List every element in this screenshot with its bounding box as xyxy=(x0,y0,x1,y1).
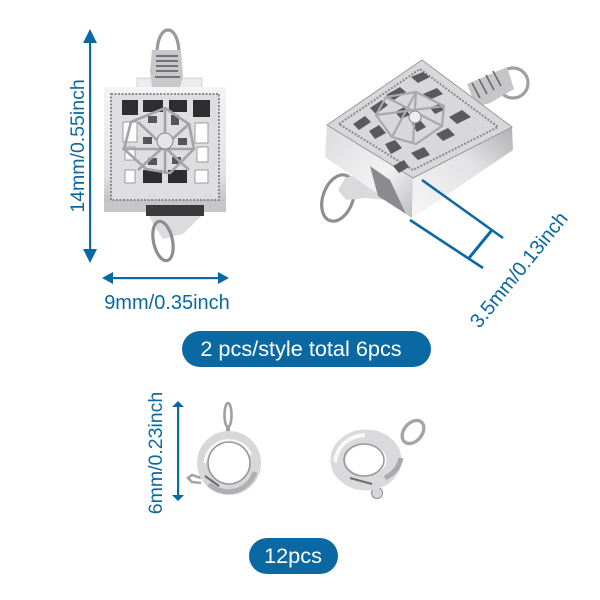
arrow: 14mm height xyxy=(83,29,97,263)
icon: spring ring front xyxy=(188,403,256,492)
label: 6mm/0.23inch: 6mm/0.23inch xyxy=(145,392,167,514)
arrow: 6mm height xyxy=(172,401,184,501)
label: 9mm/0.35inch: 9mm/0.35inch xyxy=(104,292,230,314)
icon: front view box clasp xyxy=(104,30,226,263)
pill: 12pcs xyxy=(249,538,338,574)
pill: 12pcs: 12pcs xyxy=(264,543,322,568)
icon: angled box clasp xyxy=(316,60,528,226)
label: 14mm/0.55inch: 14mm/0.55inch xyxy=(67,79,89,213)
label: 3.5mm/0.13inch: 3.5mm/0.13inch xyxy=(466,208,573,332)
pill: 2 pcs/style total 6pcs: 2 pcs/style total 6pcs xyxy=(200,336,402,361)
dimension lines: 3.5mm depth xyxy=(410,180,503,268)
arrow: 9mm width xyxy=(102,272,229,284)
pill: 2 pcs/style total 6pcs xyxy=(182,331,431,367)
icon: spring ring angled xyxy=(335,416,428,498)
